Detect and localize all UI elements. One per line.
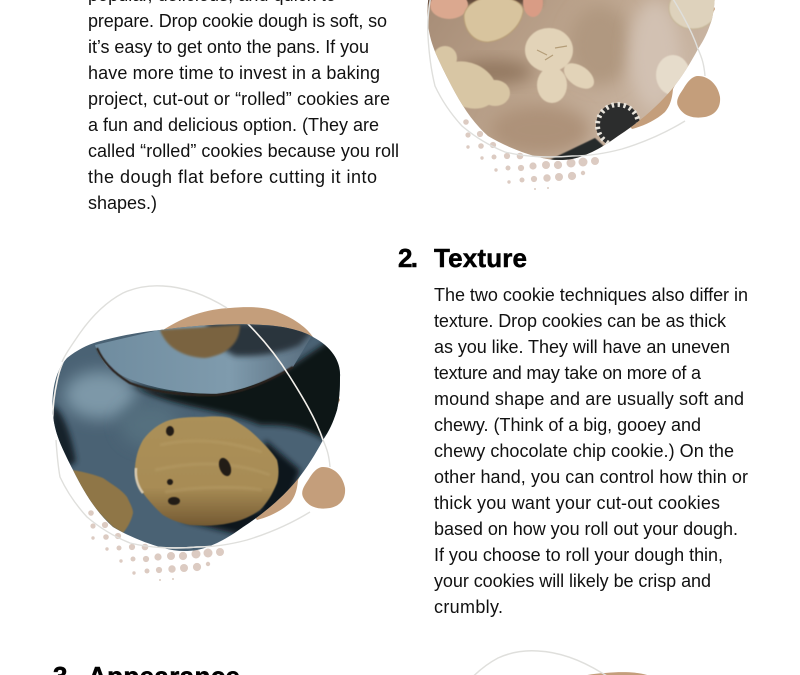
number and heading: 2. Texture: Texture bbox=[434, 243, 527, 273]
paragraph: cookie types intro: the dough flat before cutting it into bbox=[88, 167, 377, 187]
number and heading: 2. Texture: 2. bbox=[398, 243, 418, 273]
image: third blob, cropped at page bottom bbox=[474, 650, 647, 675]
paragraph: cookie types intro: prepare. Drop cookie dough is soft, so bbox=[88, 11, 387, 31]
paragraph: texture: texture and may take on more of a bbox=[434, 363, 702, 383]
paragraph: texture: texture. Drop cookies can be as thick bbox=[434, 311, 727, 331]
paragraph: cookie types intro: have more time to invest in a baking bbox=[88, 63, 380, 83]
paragraph: texture bbox=[434, 285, 748, 617]
paragraph: texture: thick you want your cut-out cookies bbox=[434, 493, 720, 513]
image: rolled cookies on parchment bbox=[420, 0, 720, 190]
paragraph: texture: chewy chocolate chip cookie.) On the bbox=[434, 441, 734, 461]
paragraph: texture: other hand, you can control how thin or bbox=[434, 467, 748, 487]
image: chocolate chip cookies on slate bbox=[45, 286, 345, 581]
paragraph: texture: The two cookie techniques also differ in bbox=[434, 285, 748, 305]
paragraph: cookie types intro: project, cut-out or “rolled” cookies are bbox=[88, 89, 390, 109]
paragraph: texture: chewy. (Think of a big, gooey and bbox=[434, 415, 701, 435]
paragraph: texture: as you like. They will have an uneven bbox=[434, 337, 730, 357]
paragraph: cookie types intro: it’s easy to get onto the pans. If you bbox=[88, 37, 369, 57]
paragraph: texture: crumbly. bbox=[434, 597, 503, 617]
paragraph: texture: mound shape and are usually soft and bbox=[434, 389, 744, 409]
paragraph: cookie types intro bbox=[88, 0, 399, 213]
paragraph: cookie types intro: a fun and delicious option. (They are bbox=[88, 115, 379, 135]
paragraph: cookie types intro: called “rolled” cookies because you roll bbox=[88, 141, 399, 161]
paragraph: texture: your cookies will likely be crisp and bbox=[434, 571, 711, 591]
paragraph: texture: based on how you roll out your dough. bbox=[434, 519, 738, 539]
paragraph: texture: If you choose to roll your dough thin, bbox=[434, 545, 723, 565]
paragraph: cookie types intro: shapes.) bbox=[88, 193, 157, 213]
